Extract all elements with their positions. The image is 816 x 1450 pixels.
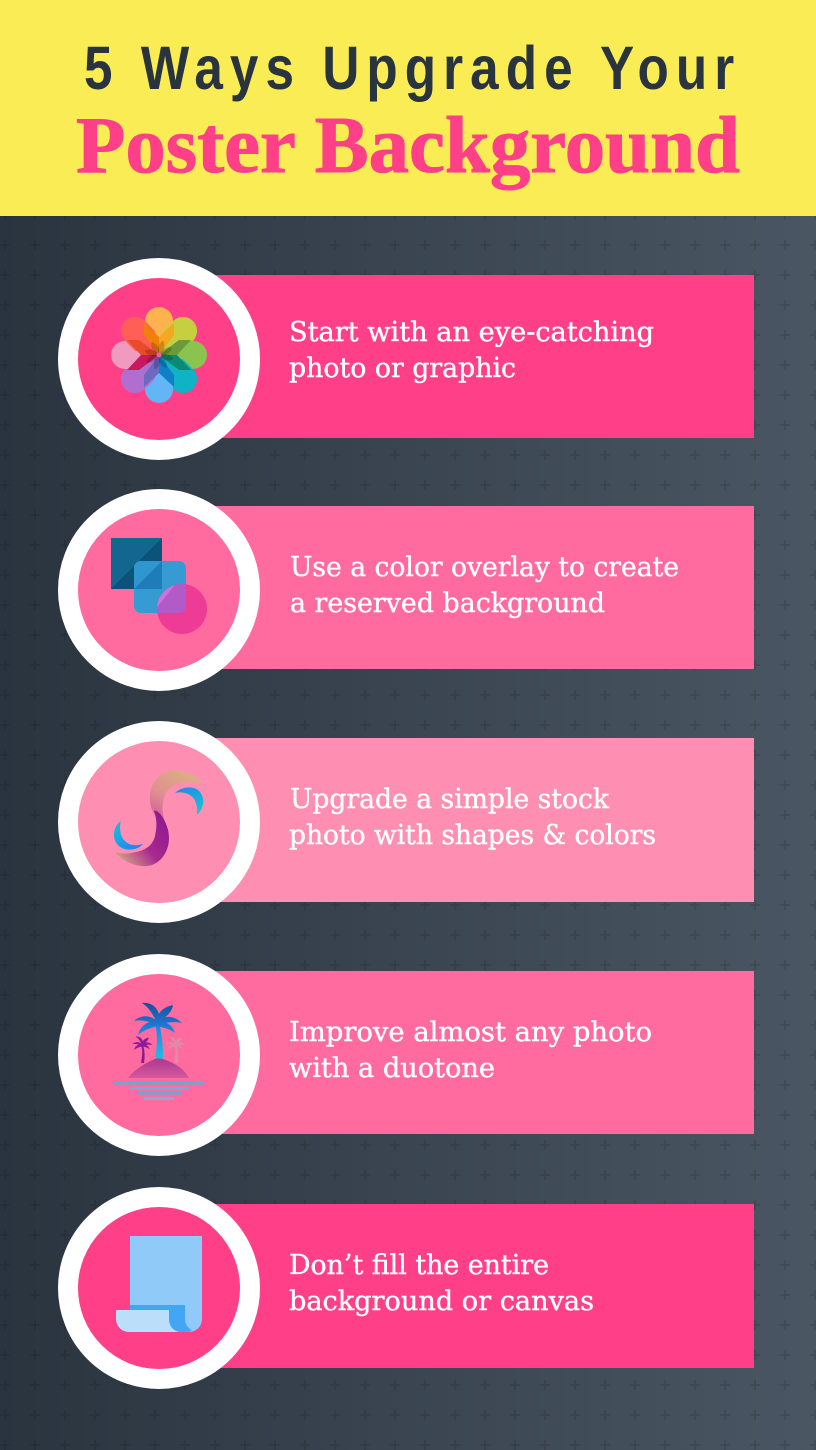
panel: step 3 — [68, 731, 754, 913]
step 5 bar — [200, 1204, 754, 1368]
step 1 circle badge — [68, 268, 250, 450]
yellow header band — [0, 0, 816, 216]
step 4 bar — [200, 971, 754, 1134]
step 3 text: photo with shapes & colors — [289, 820, 656, 851]
step 1 text — [289, 317, 654, 384]
step 1 text: photo or graphic — [289, 353, 516, 384]
icon: photo flower — [111, 307, 207, 403]
step 1 text: Start with an eye-catching — [289, 317, 654, 348]
step 4 text — [289, 1017, 652, 1084]
step 2 text — [290, 552, 679, 619]
step 3 bar — [200, 738, 754, 902]
step 3 text: Upgrade a simple stock — [290, 784, 610, 815]
step 2 circle badge — [68, 499, 250, 681]
step 2 text: a reserved background — [290, 588, 605, 619]
step 2 bar — [200, 506, 754, 669]
step 2 text: Use a color overlay to create — [290, 552, 679, 583]
step 4 text: with a duotone — [289, 1053, 495, 1084]
icon: duotone palm island — [114, 1003, 204, 1100]
step 3 circle badge — [68, 731, 250, 913]
step 4 circle badge — [68, 964, 250, 1146]
step 5 text: background or canvas — [289, 1286, 594, 1317]
title line: 5 Ways Upgrade Your: 5 Ways Upgrade Your — [84, 34, 734, 102]
icon: overlapping shapes — [111, 538, 207, 634]
step 3 text — [289, 784, 656, 851]
panel: step 2 — [68, 499, 754, 681]
panel: step 5 — [68, 1197, 754, 1379]
step 5 text: Don’t fill the entire — [289, 1250, 549, 1281]
panel: step 4 — [68, 964, 754, 1146]
icon: S swirl — [114, 770, 203, 866]
title line: Poster Background: Poster Background — [76, 102, 740, 190]
step 5 text — [289, 1250, 594, 1317]
step 4 text: Improve almost any photo — [289, 1017, 652, 1048]
icon: curled sheet — [116, 1236, 202, 1332]
panel: step 1 — [68, 268, 754, 450]
step 5 circle badge — [68, 1197, 250, 1379]
step 1 bar — [200, 275, 754, 438]
